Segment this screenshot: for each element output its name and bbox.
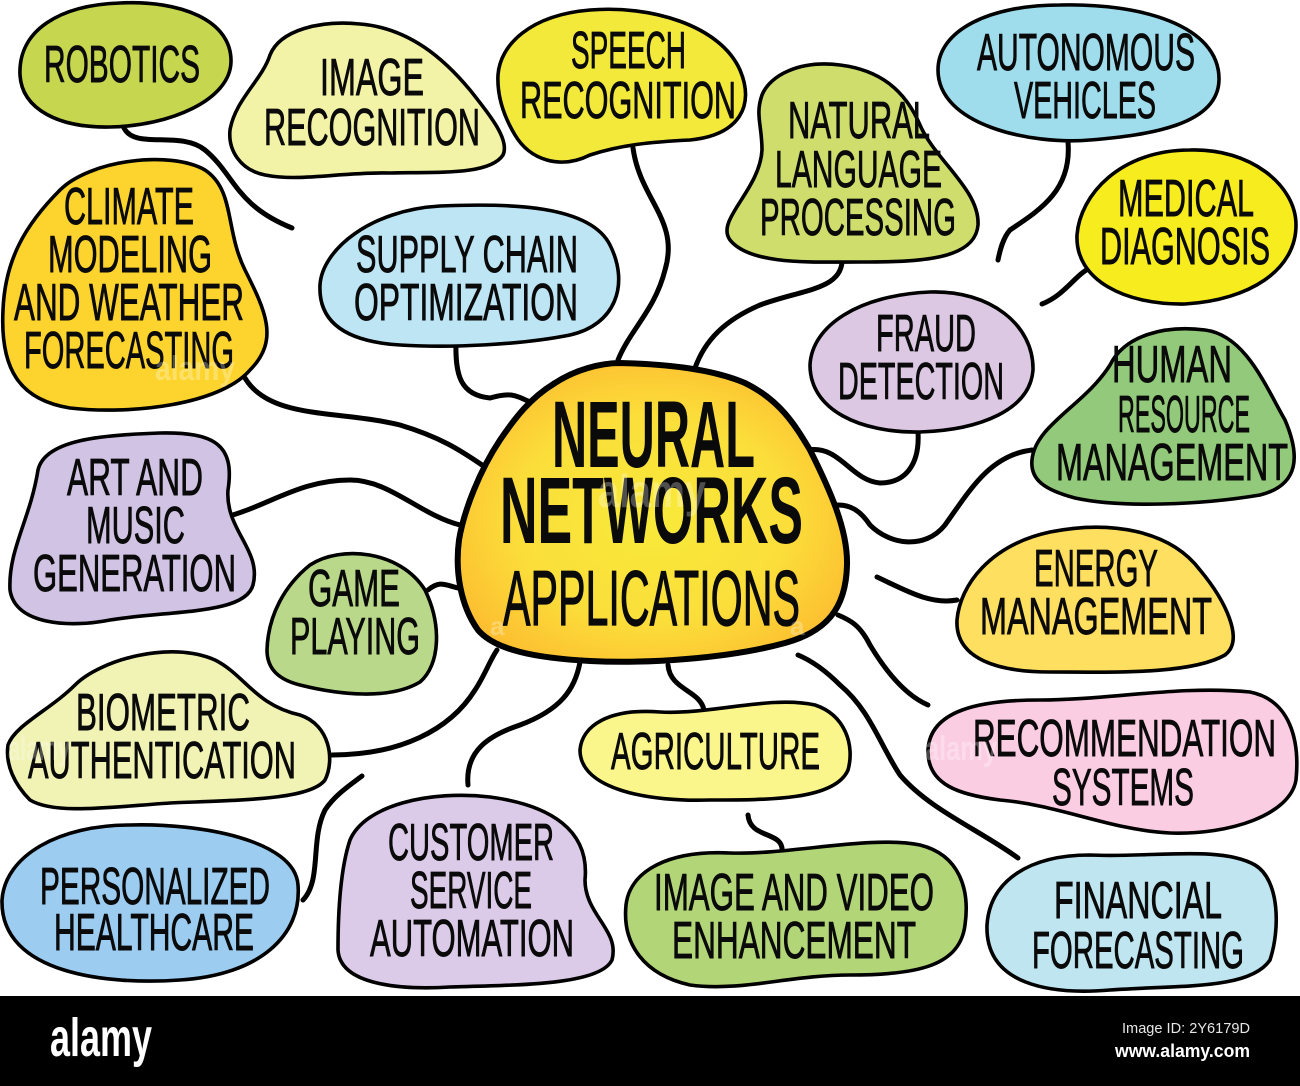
node: customer service automation: AUTOMATION xyxy=(370,910,574,968)
node: speech recognition xyxy=(498,9,746,162)
node: energy management xyxy=(957,527,1233,672)
node: speech recognition: SPEECH xyxy=(571,22,686,80)
watermarks: alamy xyxy=(925,730,997,768)
node: game playing xyxy=(267,554,436,694)
node: image recognition: IMAGE xyxy=(320,49,424,107)
node: personalized healthcare: HEALTHCARE xyxy=(54,904,254,962)
node: robotics xyxy=(20,3,231,127)
node: robotics: ROBOTICS xyxy=(44,36,200,94)
watermarks: a xyxy=(490,611,505,641)
watermarks: alamy xyxy=(155,350,235,388)
watermarks: a xyxy=(790,611,805,641)
node: supply chain optimization: SUPPLY CHAIN xyxy=(356,226,578,284)
node: personalized healthcare xyxy=(2,825,298,981)
node: climate modeling and weather forecasting: MODELING xyxy=(48,226,212,284)
central node: neural networks applications: NETWORKS xyxy=(500,458,803,564)
connector lines xyxy=(124,128,1090,900)
node: art and music generation: MUSIC xyxy=(86,497,185,555)
node: autonomous vehicles: VEHICLES xyxy=(1014,72,1156,130)
node: supply chain optimization xyxy=(320,205,619,346)
image id: Image ID: 2Y6179D xyxy=(1122,1020,1250,1037)
node: biometric authentication: AUTHENTICATION xyxy=(28,732,296,790)
node: natural language processing: PROCESSING xyxy=(760,189,956,247)
node: art and music generation: ART AND xyxy=(67,449,203,507)
node: fraud detection: FRAUD xyxy=(876,305,976,363)
node: human resource management: HUMAN xyxy=(1112,336,1232,394)
node: supply chain optimization: OPTIMIZATION xyxy=(354,274,578,332)
node: human resource management xyxy=(1032,329,1294,504)
node: fraud detection xyxy=(810,292,1033,432)
node: agriculture: AGRICULTURE xyxy=(611,723,820,781)
node: biometric authentication: BIOMETRIC xyxy=(76,684,250,742)
central node: neural networks applications xyxy=(458,363,847,662)
central title: NEURAL xyxy=(552,382,755,488)
node: customer service automation: CUSTOMER xyxy=(388,814,554,872)
node: natural language processing: NATURAL xyxy=(788,92,930,150)
footer bar xyxy=(0,996,1300,1086)
node: energy management: ENERGY xyxy=(1034,540,1158,598)
node: image and video enhancement xyxy=(626,842,966,987)
watermarks: alamy xyxy=(598,465,706,517)
node: medical diagnosis xyxy=(1077,150,1296,304)
node: climate modeling and weather forecasting: AND WEATHER xyxy=(14,274,244,332)
node: image recognition xyxy=(230,23,504,178)
node: climate modeling and weather forecasting: FORECASTING xyxy=(24,322,234,380)
node: financial forecasting xyxy=(987,854,1276,991)
node: game playing: PLAYING xyxy=(290,608,420,666)
node: climate modeling and weather forecasting xyxy=(3,160,267,410)
node: game playing: GAME xyxy=(308,560,400,618)
node: climate modeling and weather forecasting: CLIMATE xyxy=(64,178,194,236)
node: speech recognition: RECOGNITION xyxy=(520,72,736,130)
node: agriculture xyxy=(580,702,850,800)
footer logo: alamy xyxy=(50,1008,152,1068)
node: image recognition: RECOGNITION xyxy=(264,99,480,157)
central node: neural networks applications: APPLICATIONS xyxy=(503,554,800,642)
website: www.alamy.com xyxy=(1114,1041,1250,1061)
node: personalized healthcare: PERSONALIZED xyxy=(40,858,270,916)
node: recommendation systems: SYSTEMS xyxy=(1052,759,1194,817)
watermarks xyxy=(8,350,997,768)
node: natural language processing xyxy=(727,64,978,262)
watermarks: alamy xyxy=(8,730,70,768)
node: fraud detection: DETECTION xyxy=(838,353,1004,411)
node: art and music generation xyxy=(10,433,254,624)
node: natural language processing: LANGUAGE xyxy=(775,141,942,199)
node: customer service automation: SERVICE xyxy=(410,862,532,920)
node: autonomous vehicles xyxy=(938,5,1219,141)
node: customer service automation xyxy=(338,795,613,988)
node: image and video enhancement: ENHANCEMENT xyxy=(672,912,916,970)
node: art and music generation: GENERATION xyxy=(33,545,236,603)
node: image and video enhancement: IMAGE AND VIDEO xyxy=(654,864,934,922)
node: biometric authentication xyxy=(7,652,330,809)
node: recommendation systems xyxy=(928,690,1297,833)
